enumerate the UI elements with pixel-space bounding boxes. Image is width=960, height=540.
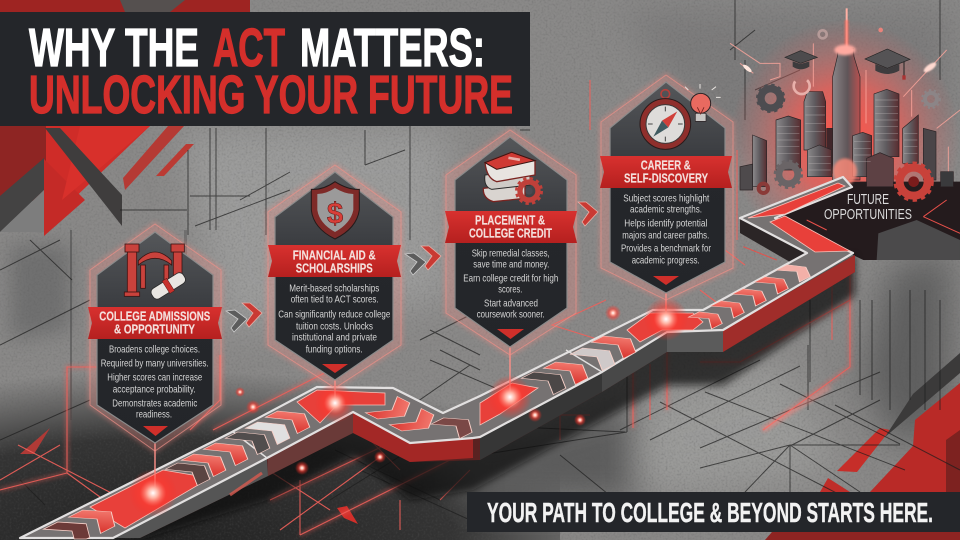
ribbon: financial aid heading: [268, 245, 401, 277]
text: financial aid points: Merit-based scholarships: [289, 283, 379, 295]
text: placement points: Skip remedial classes,: [472, 248, 550, 260]
path road: top surface: [20, 177, 853, 539]
path road: side faces and shadow: [113, 218, 855, 540]
title banner: MATTERS:: [300, 18, 485, 78]
text: career points: majors and career paths.: [622, 230, 709, 242]
text: placement points: save time and money.: [473, 259, 549, 271]
text: financial aid points: [278, 283, 390, 356]
city skyline: future opportunities: [730, 8, 960, 260]
label: future opportunities: OPPORTUNITIES: [824, 207, 912, 223]
text: placement points: Earn college credit for high: [463, 273, 558, 285]
graduation caps: [785, 49, 910, 80]
text: placement points: Start advanced: [484, 298, 538, 310]
text: financial aid points: Can significantly reduce college: [278, 309, 390, 321]
ribbon: placement heading: [445, 211, 577, 243]
road chevrons: [44, 261, 817, 539]
text: career points: [621, 193, 711, 267]
label: future opportunities: [824, 192, 912, 223]
text: placement points: [463, 248, 558, 321]
ribbon: financial aid heading: SCHOLARSHIPS: [296, 262, 373, 276]
city buildings: [740, 48, 953, 190]
red geometric shapes: top left: [0, 0, 250, 236]
ribbon: career heading: [600, 156, 732, 188]
ribbon: college admissions heading: & OPPORTUNITY: [114, 322, 196, 336]
ribbon: placement heading: COLLEGE CREDIT: [469, 226, 552, 240]
text: college admissions points: [101, 344, 209, 421]
text: placement points: scores.: [498, 284, 522, 296]
text: college admissions points: Required by many universities.: [101, 358, 209, 370]
text: placement points: coursework sooner.: [477, 309, 545, 321]
text: career points: academic progress.: [632, 255, 700, 267]
ribbon: career heading: CAREER &: [641, 158, 691, 172]
icon: shield with dollar sign: [311, 182, 359, 239]
red road sections: [90, 183, 850, 528]
connector lines and glowing nodes: [129, 293, 830, 517]
panel: placement and credit: [445, 130, 577, 355]
red geometric shapes: bottom right: [20, 353, 960, 540]
icon: college gate and diploma: [124, 244, 188, 302]
circuit lines under the road: [0, 80, 850, 535]
text: career points: Provides a benchmark for: [621, 243, 711, 255]
panel: financial aid: [268, 165, 401, 388]
text: career points: academic strengths.: [630, 204, 702, 216]
ribbon: placement heading: PLACEMENT &: [475, 214, 545, 228]
panel: career and discovery: [600, 75, 733, 300]
text: college admissions points: Higher scores can increase: [107, 372, 202, 384]
ribbon: career heading: SELF-DISCOVERY: [624, 172, 709, 186]
icon: books and gear: [483, 152, 542, 204]
icon: shield with dollar sign: $: [327, 197, 343, 230]
ribbon: college admissions heading: COLLEGE ADMISSIONS: [99, 310, 210, 324]
text: college admissions points: Demonstrates academic: [112, 398, 197, 410]
text: career points: Subject scores highlight: [623, 193, 709, 205]
label: future opportunities: FUTURE: [847, 192, 889, 208]
text: financial aid points: often tied to ACT scores.: [291, 294, 379, 306]
text: financial aid points: institutional and private: [292, 332, 377, 344]
title banner: ACT: [213, 18, 285, 78]
text: financial aid points: funding options.: [306, 344, 363, 356]
title banner: [0, 12, 530, 126]
text: career points: Helps identify potential: [624, 218, 707, 230]
gear icons: [757, 30, 940, 200]
text: college admissions points: readiness.: [136, 409, 172, 421]
text: college admissions points: Broadens college choices.: [109, 344, 200, 356]
text: college admissions points: acceptance probability.: [113, 384, 196, 396]
ribbon: college admissions heading: [88, 307, 222, 339]
text: financial aid points: tuition costs. Unlocks: [296, 321, 373, 333]
arrows between panels: [226, 202, 598, 332]
title banner: WHY THE: [29, 18, 199, 78]
title banner: UNLOCKING YOUR FUTURE: [29, 65, 513, 125]
icon: compass and light bulb: [640, 84, 721, 149]
panel: college admissions: [88, 224, 222, 451]
ribbon: financial aid heading: FINANCIAL AID &: [293, 248, 376, 262]
